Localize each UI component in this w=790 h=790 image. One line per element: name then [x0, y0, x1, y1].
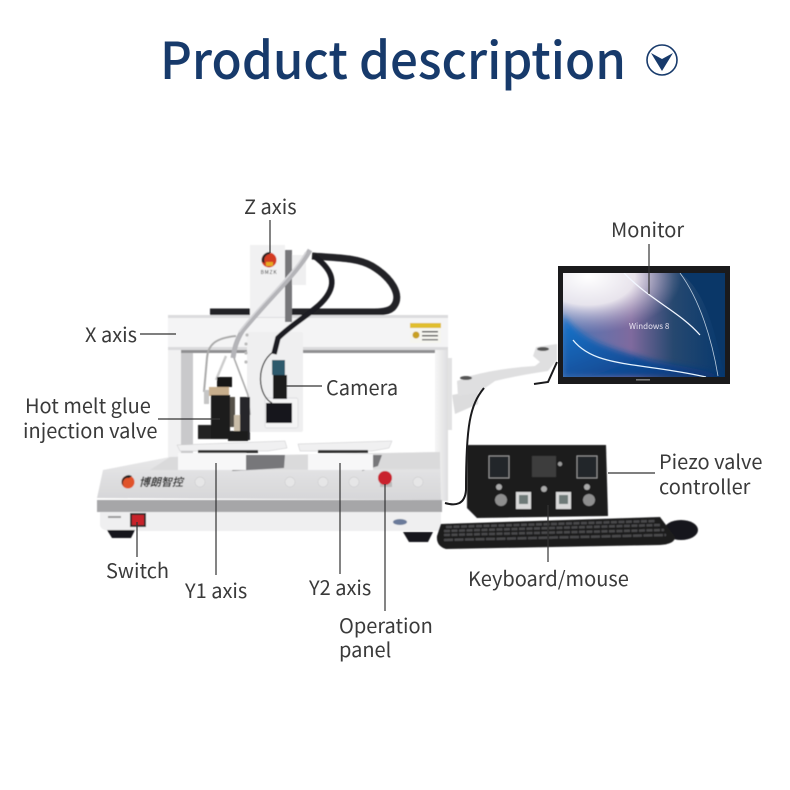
label: Z axis: Z axis: [244, 191, 297, 220]
Y2 platform: [298, 441, 392, 471]
monitor: [558, 266, 730, 384]
base: [97, 452, 442, 542]
label: Switch: [106, 522, 169, 584]
dispensing machine: [97, 245, 452, 542]
label: X axis: [85, 319, 176, 348]
label: Piezo valve controller: [608, 446, 762, 500]
Z column: [250, 245, 306, 322]
label: Monitor: Monitor: [611, 214, 684, 243]
label: Z axis: [244, 191, 297, 253]
piezo valve controller: [467, 445, 608, 518]
label: Hot melt glue injection valve: Hot melt glue: [25, 390, 151, 419]
label: Piezo valve controller: controller: [659, 471, 751, 500]
label: Camera: [286, 372, 398, 401]
label: Hot melt glue injection valve: injection valve: [23, 415, 157, 444]
monitor cable: [445, 362, 557, 504]
title: Product description: [160, 20, 626, 94]
label: Y1 axis: Y1 axis: [184, 575, 247, 604]
label: Switch: Switch: [106, 555, 169, 584]
X beam and frame: [168, 315, 452, 501]
label: Hot melt glue injection valve: [23, 390, 220, 444]
Y1 platform: [177, 441, 287, 471]
cables: [204, 250, 332, 415]
label: Operation panel: panel: [339, 634, 391, 663]
label: X axis: X axis: [85, 319, 137, 348]
label: Keyboard/mouse: Keyboard/mouse: [468, 563, 629, 592]
icon: down chevron in circle: [647, 45, 677, 75]
cable chain: [210, 256, 397, 312]
label: Y2 axis: [308, 463, 371, 601]
label: Operation panel: [339, 484, 433, 663]
carriage plate: [244, 332, 303, 432]
glue valve: [198, 377, 250, 441]
label: Operation panel: Operation: [339, 610, 433, 639]
label: Monitor: [611, 214, 684, 294]
label: Piezo valve controller: Piezo valve: [659, 446, 762, 475]
label: Camera: Camera: [326, 372, 398, 401]
Z column: BMZK: [261, 269, 277, 276]
monitor: Windows 8: [629, 321, 670, 332]
camera: [266, 360, 292, 423]
base: 博朗智控: [139, 474, 185, 490]
keyboard and mouse: [437, 517, 698, 549]
label: Y2 axis: Y2 axis: [308, 572, 371, 601]
monitor arm: [452, 344, 557, 414]
